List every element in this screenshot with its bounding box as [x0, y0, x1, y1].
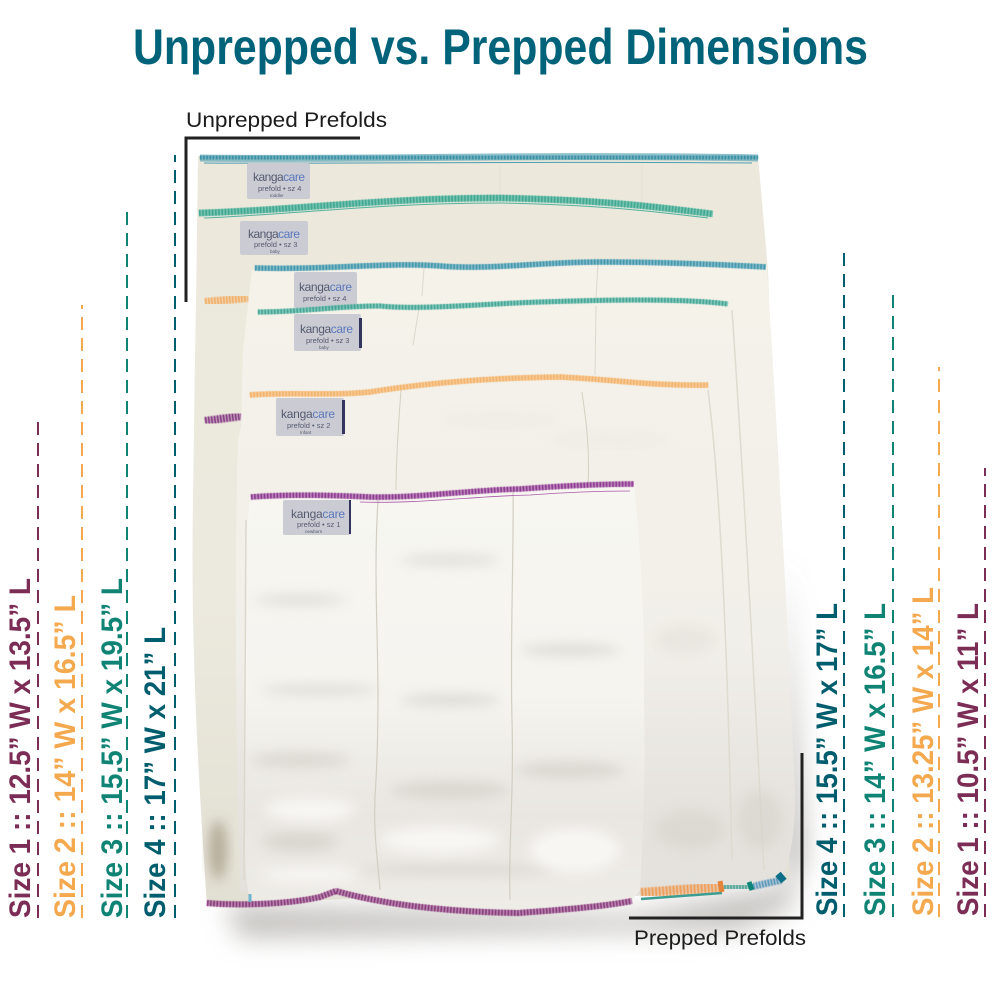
callout: prepped prefolds: Prepped Prefolds [634, 927, 806, 950]
tag: unprepped size 3 [240, 221, 308, 255]
tag: prepped size 2: kangacare [281, 407, 335, 421]
tag: unprepped size 3: kangacare [248, 227, 300, 241]
tag: prepped size 1 [283, 500, 351, 535]
title: Unprepped vs. Prepped Dimensions [133, 19, 868, 75]
tag: prepped size 1: newborn [305, 529, 323, 534]
prepped prefold size 2 [236, 377, 736, 905]
unprepped prefold size 3 stitching [199, 198, 713, 218]
unprepped size 1 stitching [205, 416, 242, 421]
tag: prepped size 2: Infant [300, 430, 312, 435]
tag: prepped size 4: kangacare [299, 280, 352, 294]
prepped prefold size 3 [239, 300, 768, 905]
left edge smudge [209, 820, 227, 880]
tag: unprepped size 4: toddler [270, 193, 284, 198]
tag: unprepped size 4 [247, 163, 310, 199]
soft wrinkles: right of prepped stack [440, 415, 782, 850]
tag: unprepped size 3: baby [270, 249, 281, 254]
callout: prepped prefolds [629, 753, 806, 950]
right label: size 3 prepped: Size 3 :: 14” W x 16.5” L [859, 603, 892, 916]
right label: size 2 prepped: Size 2 :: 13.25” W x 14” L [907, 587, 940, 916]
tag: prepped size 2: prefold • sz 2 [287, 421, 330, 430]
right label: size 1 prepped: Size 1 :: 10.5” W x 11” L [952, 603, 985, 916]
left label: size 1 unprepped: Size 1 :: 12.5” W x 13.5” L [4, 578, 37, 918]
tag: unprepped size 4: prefold • sz 4 [258, 184, 301, 193]
puffy highlights [260, 798, 620, 882]
tag: prepped size 1: prefold • sz 1 [297, 520, 340, 529]
left label: size 3 unprepped: Size 3 :: 15.5” W x 19.5” L [96, 578, 129, 918]
unprepped size 2 stitching [205, 298, 248, 302]
left label: size 2 unprepped: Size 2 :: 14” W x 16.5” L [49, 595, 82, 918]
photo: stack of prefold diapers [192, 155, 803, 938]
tag: prepped size 4: prefold • sz 4 [303, 294, 346, 303]
tag: prepped size 3: baby [319, 345, 330, 350]
left label: size 4 unprepped: Size 4 :: 17” W x 21” L [139, 627, 172, 918]
wrinkles [250, 555, 625, 875]
drop shadow under stack [225, 560, 803, 938]
tag: prepped size 3: kangacare [300, 322, 353, 336]
unprepped prefold size 4 [192, 155, 790, 905]
tag: unprepped size 4: kangacare [253, 170, 305, 184]
tag: prepped size 3 [294, 314, 362, 351]
tag: unprepped size 3: prefold • sz 3 [254, 240, 297, 249]
callout: unprepped prefolds [186, 109, 387, 302]
tag: prepped size 4 [294, 272, 357, 308]
callout: unprepped prefolds: Unprepped Prefolds [186, 109, 387, 132]
tag: prepped size 1: kangacare [291, 507, 345, 521]
prepped prefold size 4 [239, 262, 795, 905]
tag: prepped size 2 [276, 398, 345, 436]
tag: prepped size 3: prefold • sz 3 [306, 336, 349, 345]
right label: size 4 prepped: Size 4 :: 15.5” W x 17” L [811, 603, 844, 916]
prepped prefold size 1 [207, 484, 645, 913]
fold lines [375, 500, 380, 890]
